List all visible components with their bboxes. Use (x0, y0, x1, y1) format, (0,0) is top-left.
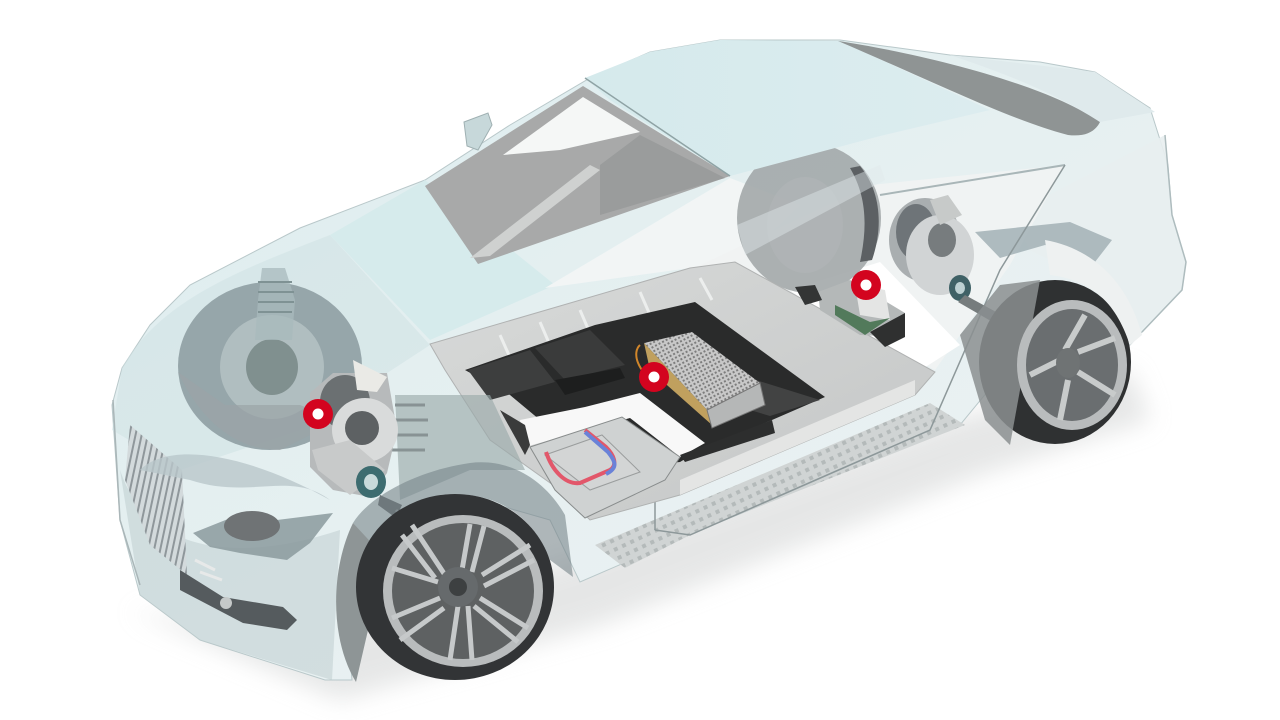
front wheel arch (336, 462, 573, 682)
cooling plate with red and blue pipes (530, 417, 680, 518)
marker: front motor (303, 399, 333, 429)
battery pack white floor (500, 368, 775, 462)
rear inverter (795, 280, 905, 347)
front suspension and chassis (392, 395, 525, 500)
far rear wheel seen through body (737, 143, 885, 293)
front wheel (356, 494, 554, 680)
front electric motor (310, 360, 470, 590)
battery pack dark cover (465, 302, 825, 470)
rear electric motor (889, 195, 1020, 335)
front grille (113, 400, 187, 585)
side sill (595, 165, 1065, 568)
headlight (140, 454, 333, 560)
interior floor and rear cabin (690, 165, 1112, 380)
battery module (636, 332, 765, 428)
marker: rear inverter (851, 270, 881, 300)
car body shell (112, 40, 1186, 680)
front lower bumper intake (180, 560, 297, 630)
windshield (425, 86, 730, 264)
side mirror (464, 113, 492, 150)
battery pack tray (430, 262, 935, 520)
glass roof (585, 40, 990, 176)
ground shadow (130, 370, 1150, 700)
rear body panel (1045, 135, 1186, 345)
far front wheel seen through body (178, 268, 362, 450)
rear window (838, 41, 1155, 135)
front lower body panel (120, 470, 340, 680)
marker: battery (639, 362, 669, 392)
rear wheel (960, 280, 1131, 445)
